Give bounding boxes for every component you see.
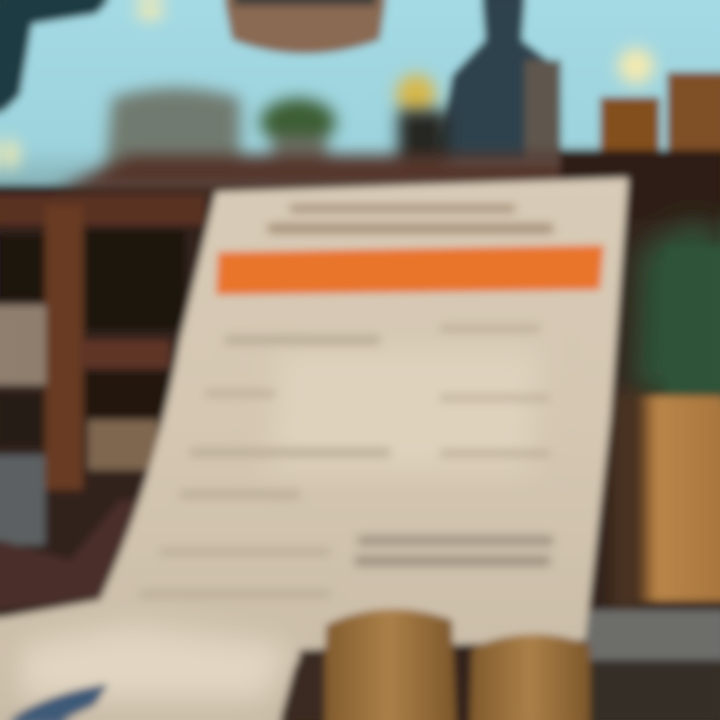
pendant lamp xyxy=(224,0,386,54)
plant xyxy=(635,222,720,395)
document lower bright curl xyxy=(20,625,290,700)
right wooden items xyxy=(600,72,720,155)
document text lines xyxy=(140,325,550,598)
plant pot xyxy=(638,396,720,601)
small shelf objects xyxy=(105,88,448,175)
dark figurine xyxy=(436,0,561,160)
background: sky-blue wall xyxy=(0,0,720,195)
top-left dark beam xyxy=(0,0,110,115)
document heading lines xyxy=(268,205,553,233)
plant base xyxy=(665,245,720,395)
cork stack left xyxy=(322,609,456,720)
desk surface left xyxy=(0,500,160,610)
blurred wall lights xyxy=(0,0,654,169)
left wooden shelving xyxy=(0,195,205,545)
desk surface right xyxy=(585,610,720,720)
document bright centre xyxy=(270,350,540,470)
dark gap behind paper xyxy=(612,390,642,610)
background: lower dark room xyxy=(0,185,720,720)
right shelf xyxy=(560,150,720,220)
dark base between corks xyxy=(280,650,325,720)
blue pen at bottom-left xyxy=(8,684,108,720)
darker text block xyxy=(355,536,553,566)
shelf top xyxy=(55,155,620,190)
cork stack right xyxy=(470,634,590,720)
orange header band xyxy=(216,245,604,295)
document sheet xyxy=(0,178,628,720)
